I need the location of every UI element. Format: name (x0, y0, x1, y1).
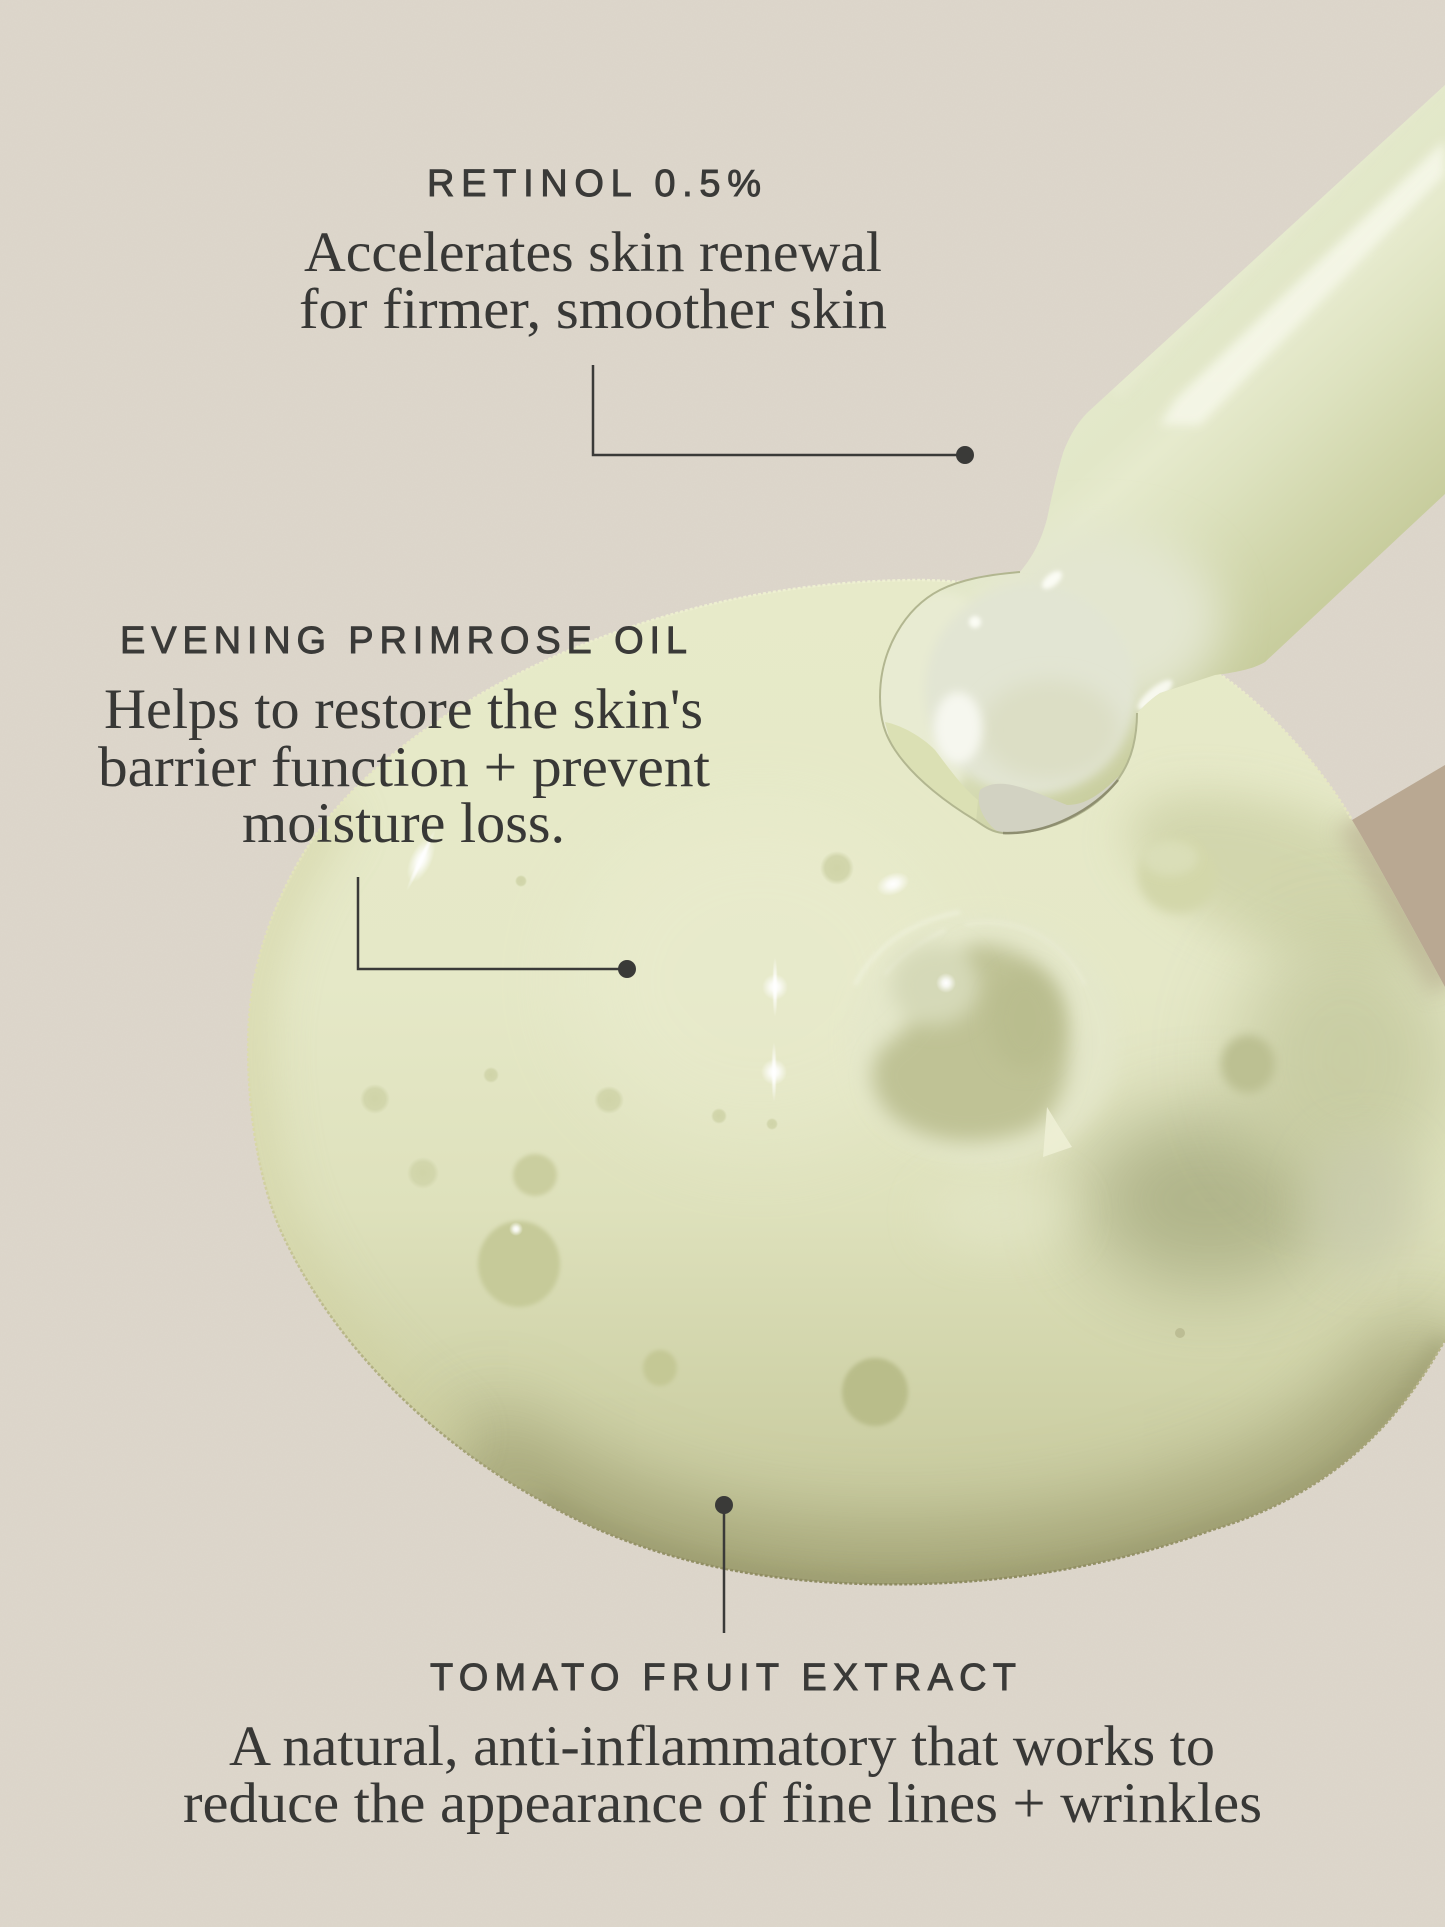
callout: evening primrose oil: Helps to restore the skin's (104, 678, 703, 741)
lower left glass (885, 722, 978, 822)
cast shadow of dropper (1340, 765, 1445, 1010)
callout: retinol: RETINOL 0.5% (427, 163, 761, 205)
callout: evening primrose oil (98, 620, 710, 978)
oil blob (248, 580, 1445, 1584)
leader line: primrose (358, 877, 636, 978)
callout: tomato fruit extract: TOMATO FRUIT EXTRACT (430, 1657, 1016, 1699)
milk inside (966, 658, 1136, 798)
callout: tomato fruit extract: reduce the appearance of fine lines + wrinkles (183, 1772, 1262, 1835)
large bubble (850, 912, 1120, 1165)
leader line: tomato (715, 1496, 733, 1633)
lower crescent (979, 775, 1120, 835)
callout: evening primrose oil: EVENING PRIMROSE OIL (120, 620, 687, 662)
callout: tomato fruit extract (183, 1496, 1262, 1835)
sparkles (401, 828, 956, 1236)
dropper (852, 65, 1445, 835)
glass rim (884, 596, 966, 784)
glint (1043, 1107, 1072, 1157)
callout: evening primrose oil: barrier function + prevent (98, 736, 710, 799)
callout: retinol (299, 163, 974, 464)
callout: tomato fruit extract: A natural, anti-inflammatory that works to (229, 1715, 1215, 1778)
leader line: retinol (593, 365, 974, 464)
callout: evening primrose oil: moisture loss. (242, 792, 565, 855)
callout: retinol: Accelerates skin renewal (304, 221, 882, 284)
small bubbles (360, 837, 1275, 1426)
neck glow (1061, 541, 1236, 721)
callout: retinol: for firmer, smoother skin (299, 278, 887, 341)
